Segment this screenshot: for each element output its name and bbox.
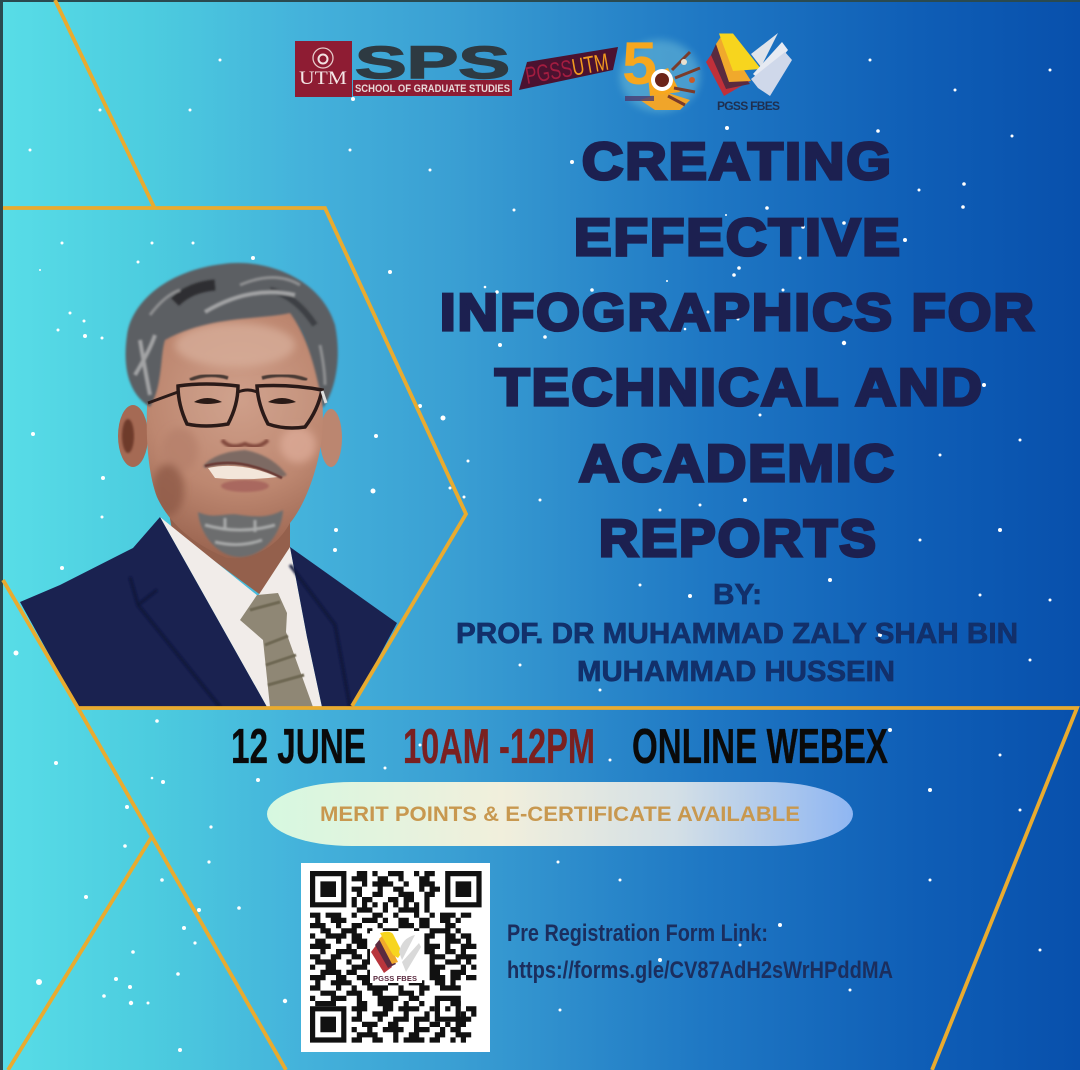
- tie: [240, 593, 313, 707]
- logo: UTM School of Graduate Studies: [295, 37, 512, 97]
- goatee: [198, 510, 283, 557]
- logo: UTM School of Graduate Studies: SPS: [355, 37, 510, 88]
- speaker byline: PROF. DR MUHAMMAD ZALY SHAH BIN: [456, 618, 1018, 650]
- event details row: 10AM -12PM: [403, 720, 595, 774]
- logo row: [295, 30, 792, 113]
- logo: 50 years anniversary: 5: [622, 30, 657, 97]
- portrait of the speaker: [20, 263, 397, 707]
- title: [440, 132, 1036, 567]
- title: INFOGRAPHICS FOR: [440, 283, 1036, 341]
- glasses: [148, 384, 326, 428]
- title: ACADEMIC: [579, 434, 896, 492]
- speaker byline: MUHAMMAD HUSSEIN: [577, 656, 895, 688]
- event details row: [231, 720, 888, 774]
- logo: 50 years anniversary: [620, 30, 700, 112]
- hair: [126, 263, 338, 408]
- QR centre book logo: PGSS FBES: [373, 974, 417, 983]
- logo: UTM School of Graduate Studies: SCHOOL OF GRADUATE STUDIES: [355, 83, 510, 95]
- shirt: [160, 517, 322, 707]
- neck: [165, 490, 290, 596]
- title: REPORTS: [599, 509, 878, 567]
- suit jacket: [20, 517, 397, 707]
- speaker byline: BY:: [713, 579, 762, 611]
- registration link: Pre Registration Form Link:: [507, 920, 768, 947]
- title: CREATING: [582, 132, 893, 190]
- merit points pill: MERIT POINTS & E-CERTIFICATE AVAILABLE: [320, 803, 800, 826]
- moustache and smile: [203, 450, 287, 478]
- ears: [118, 405, 148, 467]
- QR centre book logo: [370, 931, 422, 983]
- logo: PGSS UTM: PGSSUTM: [523, 49, 611, 90]
- event details row: 12 JUNE: [231, 720, 366, 774]
- facial highlights: [152, 323, 316, 516]
- title: TECHNICAL AND: [495, 358, 984, 416]
- logo: PGSS FBES book: PGSS FBES: [717, 99, 780, 113]
- logo: UTM School of Graduate Studies: UTM: [299, 68, 347, 89]
- speaker byline: [456, 579, 1018, 688]
- registration link: [507, 920, 893, 984]
- eyes and nose: [194, 398, 296, 404]
- hair texture: [135, 278, 325, 395]
- QR code: [301, 863, 490, 1052]
- registration link: https://forms.gle/CV87AdH2sWrHPddMA: [507, 957, 893, 984]
- logo: PGSS FBES book: [706, 33, 792, 113]
- title: EFFECTIVE: [574, 208, 902, 266]
- lapel shading: [130, 565, 350, 707]
- eyebrows: [190, 375, 307, 380]
- event details row: ONLINE WEBEX: [632, 720, 888, 774]
- face: [147, 305, 323, 558]
- merit points pill: [267, 782, 853, 846]
